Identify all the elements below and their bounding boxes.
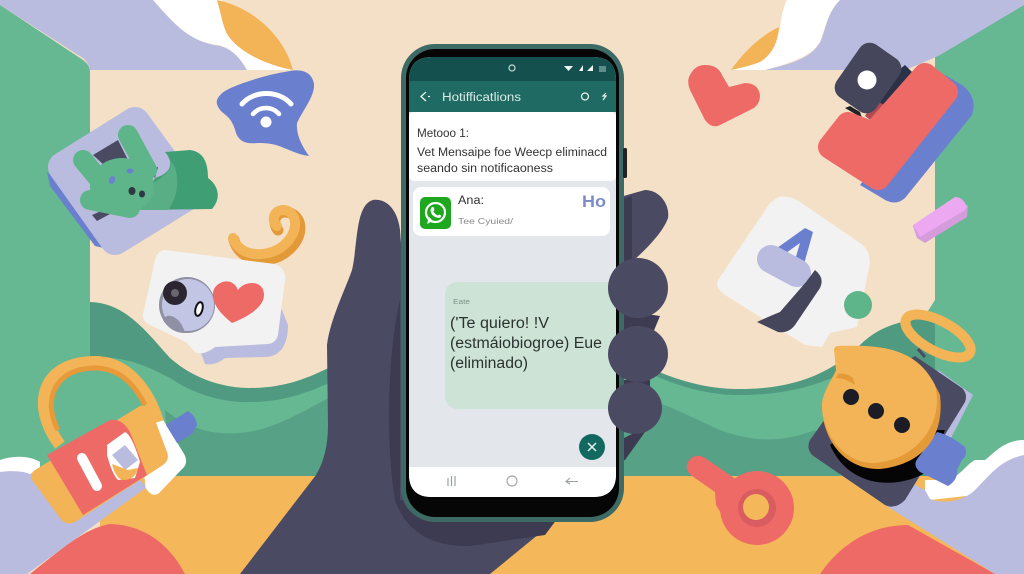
message bubble: (estmáiobiogroe) Eue — [450, 335, 602, 352]
icon: letter A card — [717, 197, 872, 347]
icon: green character card — [47, 122, 218, 250]
green dot — [844, 291, 872, 319]
notification card: Tee Cyuied/ — [458, 216, 514, 226]
shackle — [44, 362, 158, 445]
blue letter A — [777, 228, 813, 264]
card shadow — [198, 300, 288, 364]
lock body — [31, 406, 168, 523]
floating action button — [579, 434, 605, 460]
message bubble: (eliminado) — [450, 355, 528, 372]
toolbar: Hotifficatlions — [442, 92, 521, 104]
dark bar — [757, 270, 822, 332]
dark tile — [808, 356, 966, 507]
phone — [401, 44, 627, 522]
keyhole — [107, 432, 140, 480]
icon: red key — [687, 456, 794, 545]
method text card: Metooo 1: — [417, 128, 469, 140]
notification card: Ana: — [458, 195, 484, 207]
blue cap — [166, 411, 197, 443]
notification card — [413, 187, 610, 236]
bottom left blob — [0, 440, 185, 574]
icon: red heart top right — [688, 65, 760, 126]
icon: chat bubble with dots — [808, 306, 977, 507]
fingers — [608, 258, 668, 434]
icon: stacked red card — [830, 38, 974, 202]
ring with stem — [899, 306, 977, 366]
notification card: Ho — [582, 192, 606, 211]
icon: heart card — [143, 250, 288, 364]
top right lavender wave — [731, 0, 1024, 70]
method text card: Vet Mensaipe foe Weecp eliminacd — [417, 147, 607, 159]
screen — [409, 57, 616, 497]
toolbar — [409, 81, 616, 112]
lavender bar — [771, 259, 797, 273]
phone body — [401, 44, 624, 522]
bottom right blob — [820, 440, 1024, 574]
icon: pink eraser — [913, 197, 968, 243]
hand behind phone — [240, 190, 668, 574]
heart — [213, 281, 264, 323]
icon: whatsapp — [420, 197, 451, 229]
orange bubble — [822, 346, 941, 469]
message bubble — [445, 282, 616, 409]
method text card: seando sin notificaoness — [417, 163, 553, 175]
message bubble: Eate — [453, 297, 470, 306]
blue tab — [915, 432, 966, 486]
top left lavender wave — [0, 0, 293, 70]
icon: wifi bubble — [217, 70, 314, 156]
orb — [159, 277, 215, 333]
navigation bar — [409, 467, 616, 497]
status bar — [409, 57, 616, 81]
icon: padlock — [31, 362, 197, 523]
icon: orange hook — [233, 210, 300, 260]
method text card — [409, 112, 616, 181]
message bubble: ('Te quiero! !V — [450, 315, 550, 332]
